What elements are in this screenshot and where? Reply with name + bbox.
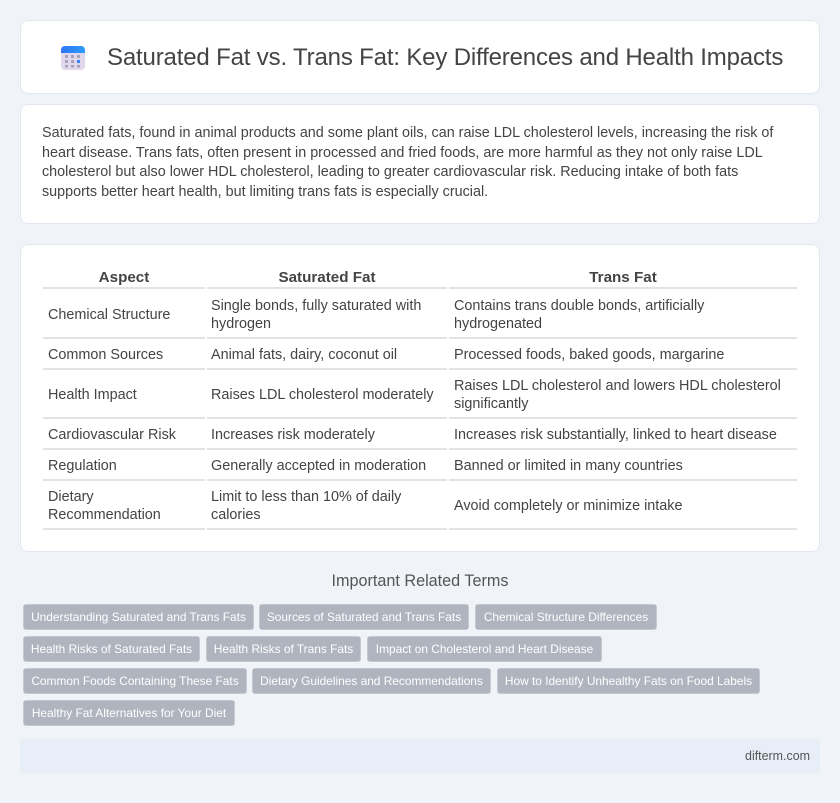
tag [475,604,657,630]
footer text: difterm.com [745,749,810,763]
tag: How to Identify Unhealthy Fats on Food Labels [505,674,752,688]
cell: Banned or limited in many countries [454,458,683,474]
panel: comparison table [20,244,820,552]
row label: dietary recommendation [48,489,161,523]
icon: calendar [61,46,85,70]
panel: intro text [20,104,820,224]
intro paragraph: Saturated fats, found in animal products and some plant oils, can raise LDL cholesterol levels, increasing the risk of [42,125,773,141]
cell: Raises LDL cholesterol moderately [211,387,434,403]
cell: Generally accepted in moderation [211,458,426,474]
cell [454,298,704,332]
cell: Contains trans double bonds, artificially [454,298,704,314]
cell: calories [211,507,261,523]
cell: hydrogenated [454,316,542,332]
tag: Sources of Saturated and Trans Fats [267,610,461,624]
tag [23,636,200,662]
row label: regulation: Regulation [48,458,117,474]
cell: Limit to less than 10% of daily [211,489,401,505]
heading: related terms: Important Related Terms [332,572,508,590]
row label: dietary recommendation: Dietary [48,489,94,505]
cell [211,489,402,523]
tag: Understanding Saturated and Trans Fats [31,610,246,624]
tag [259,604,469,630]
cell: Increases risk moderately [211,427,375,443]
cell: Increases risk substantially, linked to heart disease [454,427,777,443]
cell [454,378,781,412]
tag: Common Foods Containing These Fats [31,674,239,688]
tag [252,668,491,694]
tag: Chemical Structure Differences [484,610,648,624]
row label: common sources: Common Sources [48,347,163,363]
tag [23,604,254,630]
row label: cardiovascular risk: Cardiovascular Risk [48,427,176,443]
intro paragraph: cholesterol but also lower HDL cholesterol, leading to greater cardiovascular risk. Reducing intake of both fats [42,164,738,180]
tag [23,700,235,726]
tag: Impact on Cholesterol and Heart Disease [376,642,593,656]
tag: Health Risks of Saturated Fats [31,642,192,656]
title: Saturated Fat vs. Trans Fat: Key Differences and Health Impacts [107,44,783,71]
tag [367,636,602,662]
cell: Processed foods, baked goods, margarine [454,347,724,363]
tag: Dietary Guidelines and Recommendations [260,674,483,688]
cell: Avoid completely or minimize intake [454,498,682,514]
tag [23,668,247,694]
cell: Raises LDL cholesterol and lowers HDL cholesterol [454,378,781,394]
tag: Health Risks of Trans Fats [214,642,353,656]
tag: Healthy Fat Alternatives for Your Diet [32,706,226,720]
footer bar [20,739,820,773]
row label: dietary recommendation: Recommendation [48,507,161,523]
intro paragraph: heart disease. Trans fats, often present in processed and fried foods, are more harmful as they not only raise LDL [42,144,763,160]
row label: health impact: Health Impact [48,387,137,403]
cell [211,298,421,332]
cell: Single bonds, fully saturated with [211,298,421,314]
tag [206,636,361,662]
table header: trans fat: Trans Fat [589,269,657,286]
row label: chemical structure: Chemical Structure [48,307,170,323]
panel: title header [20,20,820,94]
intro paragraph [42,125,774,200]
intro paragraph: supports better heart health, but limiting trans fats is especially crucial. [42,184,488,200]
table header: saturated fat: Saturated Fat [278,269,376,286]
table header: aspect: Aspect [99,269,149,286]
cell: Animal fats, dairy, coconut oil [211,347,397,363]
cell: hydrogen [211,316,271,332]
cell: significantly [454,396,528,412]
tag [497,668,760,694]
